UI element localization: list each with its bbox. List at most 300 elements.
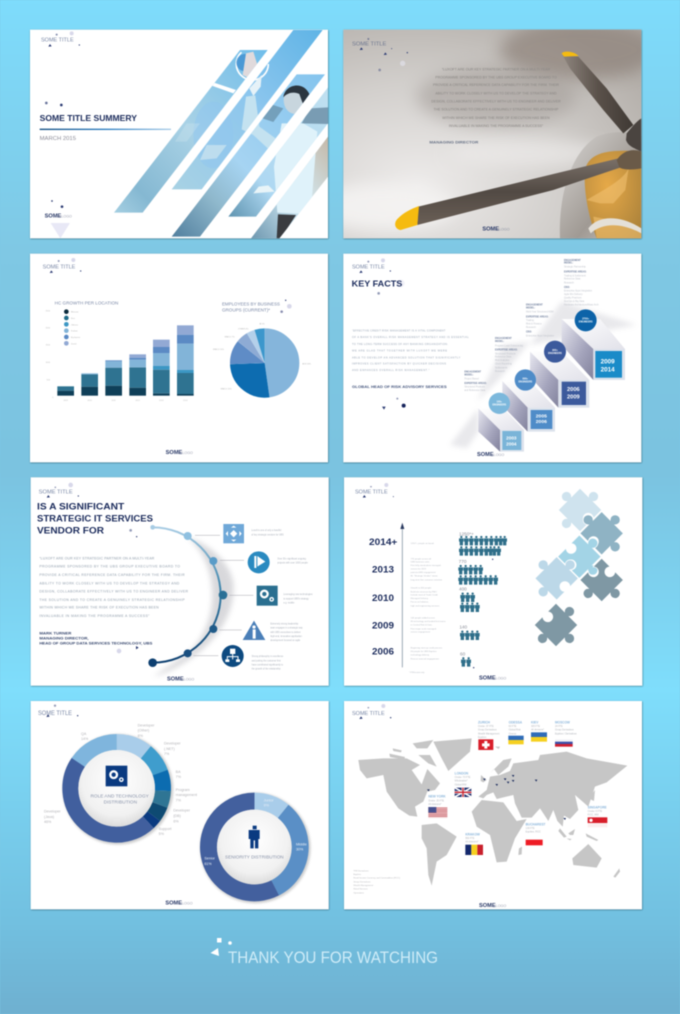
- headcount numbers: 140: [459, 624, 468, 629]
- headcount numbers: 400: [459, 587, 467, 592]
- triangle marker: [51, 223, 70, 238]
- decoration dots: [363, 483, 493, 668]
- city labels: BUCHAREST: [526, 822, 546, 826]
- logo: SOMELOGO: [166, 450, 193, 456]
- icon descriptions: to support UBS's strategy: [283, 597, 310, 600]
- chart legend: Zurich: [71, 342, 77, 345]
- donut: seniority: 61%: [204, 862, 212, 866]
- attribution: MANAGING DIRECTOR: [429, 141, 479, 145]
- slide title: SOME TITLE: [38, 711, 72, 717]
- flag: Romania: [465, 845, 483, 855]
- icon descriptions: have contributed significantly to: [252, 664, 284, 667]
- donut callouts: QA: [81, 732, 87, 736]
- quote text: DESIGN, COLLABORATE EFFECTIVELY WITH US TO ENGINEER AND DELIVER: [39, 590, 188, 594]
- pie chart: GROUPS (CURRENT)*: [222, 308, 270, 313]
- milestone notes: Include most of Trade Credit: [411, 594, 438, 597]
- quote text: THE SOLUTION AND TO CREATE A GENUINELY STRATEGIC RELATIONSHIP: [39, 598, 185, 602]
- city labels: Group Derivatives: [478, 729, 497, 732]
- attribution: MARK TURNER: [39, 631, 72, 635]
- icon descriptions: projects with over 1000 people: [277, 561, 309, 564]
- quote text: IMPROVES CLIENT SATISFACTION BY QUICKER DECISIONS: [352, 362, 446, 366]
- icon descriptions: Extremely strong leadership: [270, 622, 299, 625]
- milestone notes: Focus on Initiative,: [411, 601, 429, 604]
- headcount numbers: [459, 531, 474, 656]
- chart heading: HC GROWTH PER LOCATION: [55, 301, 118, 306]
- year labels: [369, 537, 397, 657]
- donut: seniority: Middle: [296, 842, 307, 846]
- milestone notes: IB technology and landed first teams: [411, 620, 446, 623]
- city labels: 24 FTE: [555, 726, 563, 728]
- step 2006-2009: 2009: [567, 395, 580, 401]
- year labels: 2009: [372, 620, 394, 630]
- step notes: Research: [495, 370, 506, 373]
- donut callouts: (.NET): [164, 747, 175, 751]
- stacked bar chart: 1000: [46, 362, 51, 364]
- step notes: [464, 259, 599, 392]
- stacked bar chart: 2500: [46, 311, 51, 313]
- flag: Poland: [526, 840, 543, 845]
- icon: flag circle: [248, 551, 270, 573]
- quote text: PROGRAMME SPONSORED BY THE UBS GROUP EXECUTIVE BOARD TO: [435, 75, 557, 79]
- city labels: KRAKOW: [465, 832, 480, 836]
- milestone notes: Growth to 400 people: [411, 587, 432, 590]
- pie chart: WMCO 11%: [213, 349, 224, 351]
- donut: seniority: 30%: [296, 848, 304, 852]
- quote text: AND ENHANCES OVERALL RISK MANAGEMENT.”: [352, 368, 429, 372]
- step 2006-2009: 900+: [552, 349, 558, 352]
- icon: diamond arrows: [223, 524, 244, 543]
- year labels: 2013: [372, 565, 394, 575]
- step 2009-2014: 2014: [601, 367, 615, 374]
- stacked bar chart: 500: [47, 379, 51, 381]
- puzzle: light blue piece: [558, 529, 613, 585]
- step notes: Quality Practices: [564, 296, 582, 299]
- quote text: WITHIN WHICH WE SHARE THE RISK OF EXECUTION HAS BEEN: [39, 606, 159, 610]
- decoration dots: [360, 38, 408, 71]
- title: SOME TITLE: [41, 38, 74, 44]
- icon descriptions: high-end, innovative application: [270, 635, 303, 638]
- step notes: EXPERTISE AREAS:: [495, 349, 518, 352]
- milestone notes: high end engineering services: [411, 604, 439, 607]
- map footnotes: Fixed Income Currency and Commodities (FICC): [353, 877, 400, 880]
- milestone notes: First major scale managed: [411, 627, 437, 630]
- quote text: ABILITY TO WORK CLOSELY WITH US TO DEVELOP THE STRATEGY AND: [39, 581, 180, 585]
- quote text: [39, 556, 188, 618]
- chart legend: Moscow: [71, 312, 79, 314]
- people pictograms: [458, 536, 507, 667]
- heading: STRATEGIC IT SERVICES: [37, 514, 153, 524]
- city labels: Wealth Management: [478, 732, 500, 735]
- city labels: 560 FTE: [465, 838, 475, 840]
- logo: SOMELOGO: [479, 676, 506, 682]
- donut callouts: 8%: [138, 734, 144, 738]
- stacked bar chart: 2013: [159, 400, 164, 402]
- milestone notes: Managed Delivery: [411, 597, 429, 600]
- closing message: [210, 938, 438, 967]
- timeline axis arrow: [400, 523, 404, 667]
- stacked bar chart: [46, 301, 194, 402]
- pie chart: [213, 302, 311, 390]
- city labels: Onsite: 70 FTE: [455, 776, 471, 779]
- slide title: SOME TITLE: [355, 489, 388, 495]
- step notes: Reference Data: [495, 356, 512, 359]
- quote text: [431, 67, 561, 128]
- panel: world map slide: [344, 701, 642, 909]
- world map: [358, 738, 627, 886]
- donut: seniority: 9%: [264, 804, 270, 808]
- step notes: CBO:: [564, 287, 570, 289]
- step notes: DevOps & Big Data: [564, 300, 585, 303]
- step notes: Multi-Year Structured ADM: [526, 311, 554, 314]
- milestone notes: Rescue sourced engagement: [411, 657, 439, 660]
- flag: Ukraine (Odessa): [508, 736, 524, 744]
- city labels: Wholesales*: [455, 781, 468, 783]
- step notes: Settlements: [495, 366, 508, 369]
- donut callouts: 46%: [44, 820, 52, 824]
- map footnotes: Operations: [353, 891, 364, 894]
- icon descriptions: and putting the customer first: [252, 659, 281, 662]
- decoration dots: [45, 31, 80, 208]
- year labels: 2010: [372, 593, 394, 603]
- icon: person: [249, 826, 260, 848]
- headcount numbers: 1250*+: [459, 531, 474, 536]
- city labels: 60 FTE: [509, 726, 517, 728]
- step notes: Structured Products: [464, 386, 486, 389]
- city labels: Equities: [478, 736, 487, 739]
- stacked bar chart: 2011: [112, 400, 116, 402]
- milestone notes: Beginning start-up credit process: [411, 647, 442, 650]
- closing text: THANK YOU FOR WATCHING: [228, 949, 438, 967]
- stacked bar chart: 1500: [46, 345, 51, 347]
- step notes: Reference Data: [564, 278, 581, 281]
- step notes: Enterprise Apps Integration: [564, 290, 593, 293]
- city labels: All divisions*: [531, 729, 544, 732]
- icon descriptions: Leveraging new technologies: [283, 593, 313, 596]
- logo: SOMELOGO: [477, 452, 504, 458]
- milestone notes: 770 people across all: [411, 557, 432, 560]
- step notes: Enterprise Apps Integration: [526, 334, 555, 337]
- panel: growth timeline slide: [344, 476, 642, 686]
- icon descriptions: with UBS executives to deliver: [270, 631, 301, 634]
- donut callouts: [44, 723, 197, 836]
- milestone notes: service engagement: [411, 631, 430, 634]
- heading: [37, 502, 153, 536]
- panel: distribution donuts slide: [31, 701, 329, 911]
- icon descriptions: e.g. mobile: [283, 603, 295, 605]
- city labels: All divisions*: [428, 803, 441, 806]
- quote text: ABILITY TO WORK CLOSELY WITH US TO DEVELOP THE STRATEGY AND: [435, 91, 557, 95]
- puzzle: pale left piece: [523, 544, 585, 606]
- step 2006-2009: ENGINEERS: [548, 353, 562, 355]
- donut callouts: (Java): [44, 815, 54, 819]
- step notes: MODEL:: [526, 308, 535, 310]
- step notes: ENGAGEMENT: [495, 337, 512, 340]
- slide title: SOME TITLE: [39, 489, 73, 495]
- puzzle pieces: [523, 476, 636, 659]
- quote text: [352, 329, 469, 372]
- logo: SOMELOGO: [167, 676, 194, 682]
- year labels: 2006: [372, 647, 394, 657]
- map footnotes: Group Derivatives: [353, 880, 371, 883]
- step notes: Structured Products: [495, 352, 516, 355]
- step notes: EXPERTISE AREAS:: [564, 271, 587, 274]
- donut: seniority: Junior: [264, 799, 274, 803]
- quote text: INVALUABLE IN MAKING THE PROGRAMME A SUCCESS”: [39, 614, 150, 618]
- donut callouts: 14%: [81, 737, 89, 741]
- icon descriptions: of key strategic vendors for UBS: [251, 533, 284, 536]
- city labels: Greece: [509, 732, 517, 735]
- city labels: All divisions*: [465, 841, 478, 844]
- date: MARCH 2015: [40, 136, 76, 142]
- year labels: 2014+: [369, 537, 397, 547]
- heading: SOME TITLE SUMMERY: [40, 113, 137, 123]
- donut callouts: (Other): [138, 729, 149, 733]
- icon descriptions: development focused on agile: [270, 639, 301, 642]
- attribution: [39, 631, 153, 646]
- icon descriptions: [251, 529, 313, 671]
- icon: org chart: [222, 645, 244, 667]
- icon: warning triangle: [243, 621, 265, 640]
- heading: KEY FACTS: [352, 279, 403, 289]
- step notes: Hardware Architecture/Mass Arch: [564, 304, 599, 307]
- donut callouts: 7%: [176, 775, 182, 779]
- icon descriptions: Luxoft is one of only a handful: [251, 529, 282, 532]
- step 2006-2009: 2006: [567, 387, 580, 393]
- milestone notes: UBS business units: [411, 560, 429, 563]
- staircase shadows: [450, 302, 637, 448]
- step 2009-2014: ENGINEERS: [579, 322, 593, 324]
- icon descriptions: Over 30+ significant ongoing: [277, 557, 307, 560]
- decoration dots: [46, 704, 78, 717]
- milestone notes: in Central Risk & Data: [411, 623, 433, 626]
- milestone notes: Build site structure by PMO: [411, 590, 437, 593]
- step 2005-2006: ENGINEERS: [518, 381, 533, 383]
- city labels: LONDON: [455, 771, 469, 775]
- panel: key facts slide: [343, 254, 641, 462]
- city labels: Global Risk: [509, 730, 521, 732]
- milestone notes: 140 people added across: [411, 617, 435, 620]
- step notes: Risk Analytics: [495, 359, 510, 362]
- step notes: Research: [526, 326, 537, 329]
- milestone notes: 60 people for UBS Equities: [411, 650, 437, 653]
- donut callouts: Program: [176, 788, 190, 792]
- map footnotes: Retail Services: [353, 888, 368, 891]
- puzzle: blue-grey piece: [574, 499, 636, 561]
- logo: SOMELOGO: [165, 900, 193, 906]
- milestone notes: First fully stand-alone managed: [411, 564, 442, 567]
- quote text: “LUXOFT ARE OUR KEY STRATEGIC PARTNER ON A MULTI-YEAR: [442, 67, 551, 71]
- quote text: DESIGN, COLLABORATE EFFECTIVELY WITH US TO ENGINEER AND DELIVER: [431, 99, 561, 103]
- city labels: Global IRM: [455, 784, 466, 786]
- flag: Ukraine (Kiev): [531, 732, 547, 742]
- step 2005-2006: 600+: [523, 377, 529, 380]
- donut callouts: management: [176, 793, 197, 797]
- slide title: SOME TITLE: [43, 264, 76, 270]
- step 2006-2009: [530, 341, 589, 408]
- panel: charts slide: [30, 254, 328, 462]
- donut callouts: 7%: [164, 752, 170, 756]
- donut callouts: Support: [159, 827, 171, 831]
- quote text: PROGRAMME SPONSORED BY THE UBS GROUP EXECUTIVE BOARD TO: [39, 565, 180, 569]
- city labels: Equities / Derivatives: [555, 732, 578, 735]
- headcount numbers: 60: [460, 651, 466, 656]
- step notes: Project Based: [464, 377, 480, 380]
- step 2009-2014: 2009: [601, 358, 615, 365]
- panel: strategic vendor slide: [31, 477, 329, 686]
- step 2003-2004: 100+: [497, 401, 503, 404]
- heading underline: [40, 129, 171, 130]
- staircase: [478, 309, 625, 452]
- city labels: Onsite: 37 FTE: [478, 725, 494, 728]
- panel: cover slide: [30, 30, 328, 238]
- icon: gears: [257, 586, 278, 606]
- city labels: FICC, WM: [588, 815, 599, 817]
- quote text: PROVIDE A CRITICAL REFERENCE DATA CAPABILITY FOR THE FIRM. THEIR: [39, 573, 185, 577]
- pie chart: OTHER 4%: [238, 329, 249, 331]
- chart legend: [64, 309, 80, 346]
- step notes: EXPERTISE AREAS:: [464, 382, 487, 385]
- pie chart: WMCO 7%: [225, 337, 235, 339]
- decoration dots: [47, 483, 139, 653]
- city labels: 130 FTE: [526, 828, 535, 830]
- step notes: and Reference Data: [464, 389, 486, 392]
- step 2009-2014: [562, 309, 625, 380]
- slide title: SOME TITLE: [352, 264, 385, 270]
- flag: Russia: [555, 739, 573, 747]
- quote text: THE SOLUTION AND TO CREATE A GENUINELY STRATEGIC RELATIONSHIP: [433, 108, 559, 112]
- step 2009-2014: 2700+: [582, 318, 590, 321]
- propeller photo: [342, 29, 642, 239]
- flag: United States: [428, 807, 447, 818]
- donut callouts: (DB): [173, 814, 181, 818]
- icon descriptions: team engages in a strategic way: [270, 627, 303, 630]
- city labels: Onsite: 25 FTE: [428, 799, 444, 802]
- decoration dots: [50, 258, 292, 313]
- logo: SOMELOGO: [45, 213, 72, 219]
- attribution: MANAGING DIRECTOR,: [39, 636, 89, 640]
- step notes: MODEL:: [464, 374, 474, 376]
- location markers: [427, 775, 566, 820]
- step notes: Agile Mix Delivery: [564, 293, 583, 296]
- quote text: “LUXOFT ARE OUR KEY STRATEGIC PARTNER ON A MULTI-YEAR: [39, 556, 155, 560]
- donut callouts: 5%: [159, 832, 165, 836]
- stacked bar chart: 2012: [135, 400, 140, 402]
- milestone notes: BL "Strategic Vendor" status: [411, 575, 438, 578]
- map footnotes: [353, 869, 400, 894]
- city labels: Equities, FICC: [526, 831, 541, 834]
- city labels: MOSCOW: [555, 720, 570, 724]
- chart legend: Bucharest: [71, 336, 80, 339]
- milestone notes: point-to-UBS engagement: [411, 571, 436, 574]
- pie chart: BUS 53%: [302, 363, 311, 365]
- quote text: “EFFECTIVE CREDIT RISK MANAGEMENT IS A VITAL COMPONENT: [352, 329, 446, 333]
- diagonal photo strips: [114, 30, 328, 238]
- donut callouts: 6%: [173, 819, 179, 823]
- flag: United Kingdom: [455, 788, 471, 797]
- icon descriptions: the growth of the relationship: [252, 668, 281, 671]
- puzzle: slate piece: [574, 558, 630, 614]
- step 2003-2004: 2004: [506, 442, 517, 447]
- step notes: Strategic Partnership: [564, 266, 586, 269]
- pie chart: WMCO 21%: [221, 388, 232, 390]
- donut callouts: Developer: [138, 723, 155, 727]
- step notes: MODEL:: [564, 263, 573, 265]
- step notes: Trading: [526, 319, 535, 322]
- closing icon: [210, 938, 232, 956]
- donut callouts: Developer: [173, 809, 191, 813]
- donut callouts: BA: [176, 770, 181, 774]
- milestone notes: [409, 542, 446, 674]
- donut callouts: Developer: [44, 810, 61, 814]
- milestone notes: service for 2013: [411, 567, 427, 570]
- chart legend: Odessa: [71, 324, 79, 326]
- slide title: SOME TITLE: [352, 41, 387, 47]
- step notes: Client Reporting: [495, 362, 512, 365]
- map footnotes: Wealth Management: [353, 884, 374, 887]
- attribution: GLOBAL HEAD OF RISK ADVISORY SERVICES: [352, 385, 447, 389]
- step notes: EXPERTISE AREAS:: [526, 315, 549, 318]
- milestone notes: 1250*+ people on board: [411, 542, 435, 545]
- city labels: NEW YORK: [428, 795, 446, 799]
- city labels: ODESSA: [509, 720, 523, 724]
- chart legend: Krakow: [71, 330, 78, 333]
- city labels: KIEV: [531, 720, 539, 724]
- donut callouts: 7%: [176, 798, 182, 802]
- step notes: ENGAGEMENT: [526, 304, 543, 307]
- step 2003-2004: [478, 393, 524, 452]
- donut callouts: Developer: [164, 742, 181, 746]
- heading: IS A SIGNIFICANT: [37, 502, 125, 512]
- pie heading: EMPLOYEES BY BUSINESS: [222, 302, 280, 307]
- milestone notes: * FTE/location only: [409, 671, 424, 674]
- step 2005-2006: 2006: [536, 419, 547, 425]
- step notes: CBO:: [526, 332, 532, 334]
- flag: Switzerland: [478, 739, 493, 750]
- decoration dots: [359, 704, 391, 719]
- step notes: Program Lead Outsourcing: [495, 344, 524, 347]
- step 2003-2004: 2003: [506, 435, 517, 440]
- arc shadow: [153, 537, 233, 677]
- milestone notes: long term first customer retention: [411, 578, 443, 581]
- icon descriptions: Strong philosophy in excellence: [252, 655, 284, 658]
- icon: gears: [106, 766, 127, 786]
- city labels: 305 FTE: [531, 726, 540, 728]
- quote text: ABLE TO DEVELOP AN ADVANCED SOLUTION THAT SIGNIFICANTLY: [352, 355, 461, 359]
- slide title: SOME TITLE: [352, 711, 385, 717]
- connector lines: [193, 535, 253, 656]
- city labels: Onsite: 6 FTE: [588, 810, 602, 813]
- step notes: ENGAGEMENT: [564, 259, 581, 262]
- quote text: INVALUABLE IN MAKING THE PROGRAMME A SUCCESS”: [449, 124, 544, 128]
- donut: role and technology: DISTRIBUTION: [104, 800, 137, 805]
- map footnotes: *FM Derivatives: [353, 869, 369, 872]
- step notes: ENGAGEMENT: [464, 370, 482, 373]
- city labels: Group Derivatives: [555, 729, 574, 732]
- puzzle: pale top piece: [546, 476, 608, 538]
- step notes: Trading & Settlement: [564, 274, 586, 277]
- step notes: MODEL:: [495, 341, 504, 343]
- map footnotes: Equities: [353, 873, 361, 876]
- city labels: ZURICH: [478, 720, 491, 724]
- headcount numbers: 770: [459, 559, 467, 564]
- chart legend: Kiev: [71, 318, 75, 320]
- stacked bar chart: 0: [52, 397, 54, 399]
- decoration dots: [359, 258, 406, 410]
- quote text: WITHIN WHICH WE SHARE THE RISK OF EXECUTION HAS BEEN: [442, 116, 550, 120]
- puzzle: detached slate piece: [528, 597, 590, 659]
- city labels: SINGAPORE: [588, 805, 607, 809]
- stacked bar chart: 2010: [87, 400, 93, 402]
